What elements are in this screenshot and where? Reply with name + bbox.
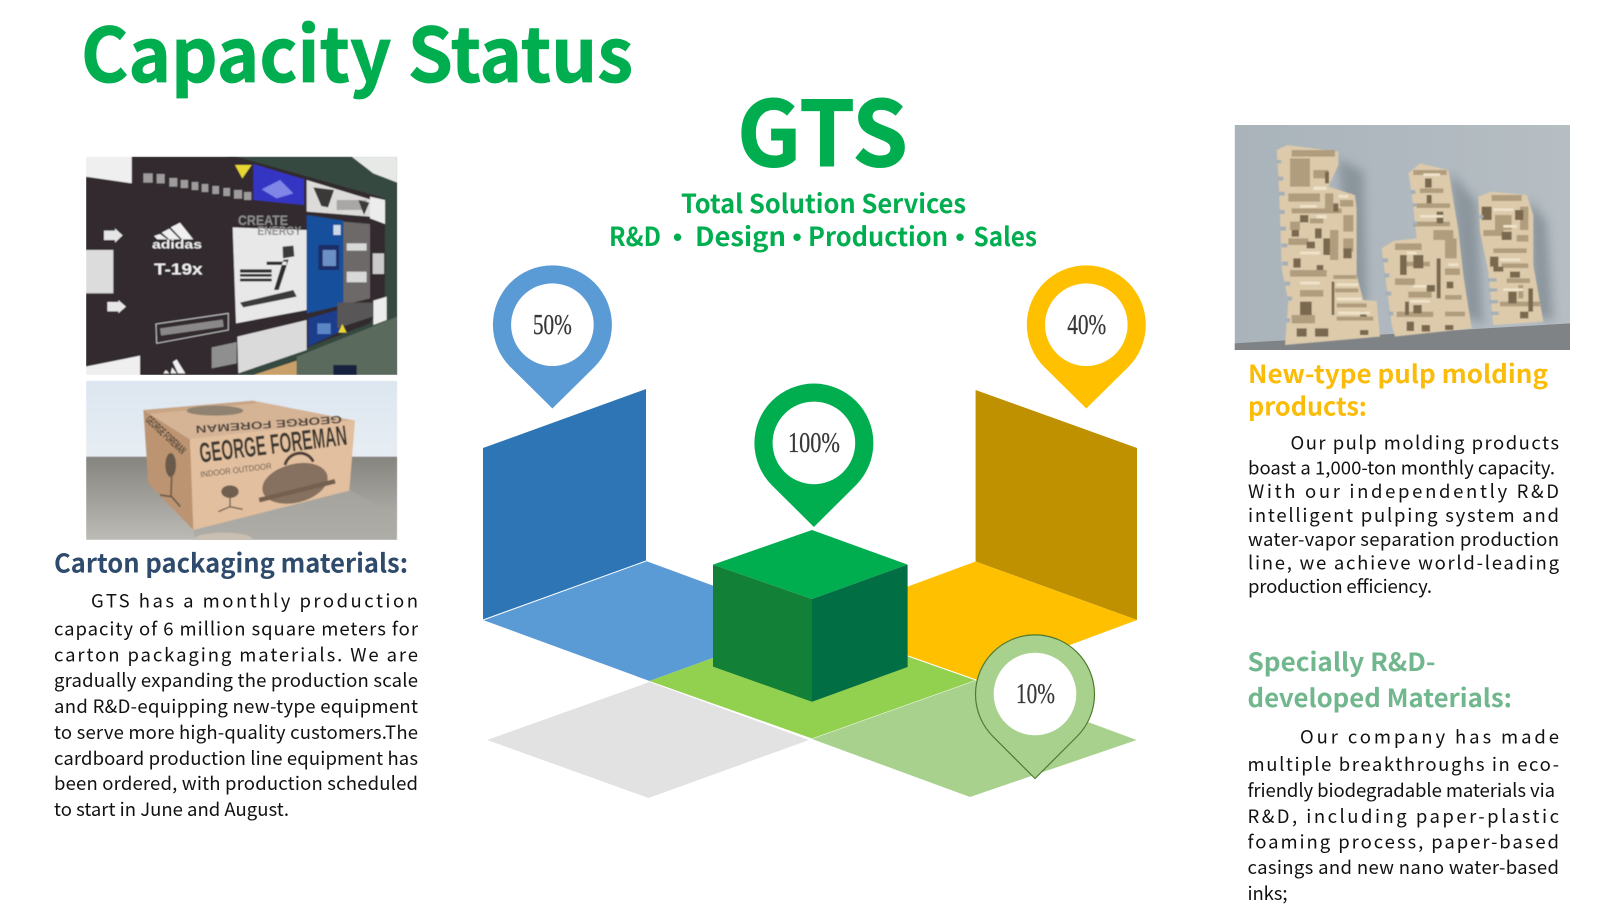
body text: carton packaging: and R&D-equipping new-type equipment [54, 693, 418, 719]
subheading: services: R&D [609, 217, 661, 254]
body text: pulp molding: intelligent pulping system and [1248, 502, 1559, 528]
body text: carton packaging [54, 588, 419, 822]
body text: pulp molding: water-vapor separation production [1248, 526, 1559, 552]
body text: carton packaging: carton packaging materials. We are [54, 642, 418, 668]
body text: pulp molding: production efficiency. [1248, 573, 1432, 599]
grey floor [487, 682, 809, 798]
heading: developed materials [1248, 643, 1512, 715]
body text: carton packaging: capacity of 6 million square meters for [54, 616, 419, 642]
isometric capacity diagram [483, 265, 1146, 798]
body text: developed materials [1248, 724, 1559, 906]
photo: George Foreman carton: GEORGE FOREMAN [195, 413, 342, 435]
light green floor [812, 680, 1137, 797]
pin: 10%: 10% [1016, 679, 1055, 710]
body text: developed materials: inks; [1248, 880, 1288, 906]
subheading: services: • [955, 222, 965, 252]
pin: 100% [754, 384, 873, 527]
body text: carton packaging: GTS has a monthly production [91, 588, 418, 614]
subheading: services [609, 184, 1037, 254]
body text: pulp molding: With our independently R&D [1248, 478, 1559, 504]
body text: carton packaging: to serve more high-quality customers.The [54, 719, 418, 745]
subheading: services: Production [808, 217, 948, 254]
pin: 100%: 100% [788, 428, 840, 459]
heading: pulp molding [1248, 355, 1548, 424]
photo: printed treadmill carton: ENERGY [257, 224, 301, 238]
photo: George Foreman carton: GEORGE FOREMAN [198, 420, 349, 469]
pin: 40% [1027, 265, 1146, 408]
body text: developed materials: casings and new nano water-based [1248, 854, 1559, 880]
body text: pulp molding: boast a 1,000-ton monthly capacity. [1248, 454, 1555, 480]
subheading: services: Design [695, 217, 786, 254]
body text: pulp molding [1248, 430, 1560, 599]
gold wall [976, 390, 1137, 620]
body text: pulp molding: Our pulp molding products [1290, 430, 1559, 456]
body text: carton packaging: to start in June and August. [54, 796, 289, 822]
photo: pulp molded products [1235, 125, 1570, 350]
photo: George Foreman carton [86, 381, 397, 547]
body text: developed materials: foaming process, paper-based [1248, 828, 1559, 854]
photo: printed treadmill carton [86, 157, 397, 375]
subheading: services: Total Solution Services [681, 184, 966, 221]
heading: developed materials: Specially R&D- [1248, 643, 1436, 679]
pin: 50%: 50% [533, 310, 572, 341]
body text: carton packaging: gradually expanding the production scale [54, 667, 418, 693]
body text: developed materials: Our company has made [1300, 724, 1559, 750]
panel: carton packaging materials [54, 544, 419, 822]
body text: developed materials: multiple breakthroughs in eco- [1248, 751, 1559, 777]
photo: printed treadmill carton: T-19x [154, 262, 203, 279]
panel: specially developed materials [1248, 643, 1559, 906]
subheading: services: • [792, 222, 802, 252]
body text: carton packaging: cardboard production line equipment has [54, 745, 418, 771]
heading: carton packaging: Carton packaging materials: [54, 544, 408, 580]
blue wall [483, 389, 646, 620]
photo: printed treadmill carton: CREATE [238, 212, 288, 228]
heading: pulp molding: New-type pulp molding [1248, 355, 1548, 391]
green cube [713, 530, 908, 702]
blue floor [483, 561, 812, 681]
photo: George Foreman carton: INDOOR OUTDOOR [200, 461, 272, 479]
heading: pulp molding: products: [1248, 388, 1367, 424]
body text: developed materials: R&D, including paper-plastic [1248, 803, 1559, 829]
pin: 50% [493, 265, 612, 408]
green floor [650, 622, 976, 738]
pin: 40%: 40% [1067, 310, 1106, 341]
body text: carton packaging: been ordered, with production scheduled [54, 770, 418, 796]
heading: GTS: GTS [737, 62, 908, 192]
panel: pulp molding products [1248, 355, 1560, 599]
body text: developed materials: friendly biodegradable materials via [1248, 777, 1555, 803]
photo: printed treadmill carton: adidas [152, 237, 202, 251]
subheading: services: • [673, 222, 682, 252]
heading: developed materials: developed Materials: [1248, 679, 1512, 715]
photo: George Foreman carton: GEORGE FOREMAN [143, 414, 188, 457]
pin: 10% [976, 635, 1094, 778]
body text: pulp molding: line, we achieve world-leading [1248, 550, 1560, 576]
subheading: services: Sales [974, 217, 1037, 254]
gold floor [812, 562, 1137, 680]
